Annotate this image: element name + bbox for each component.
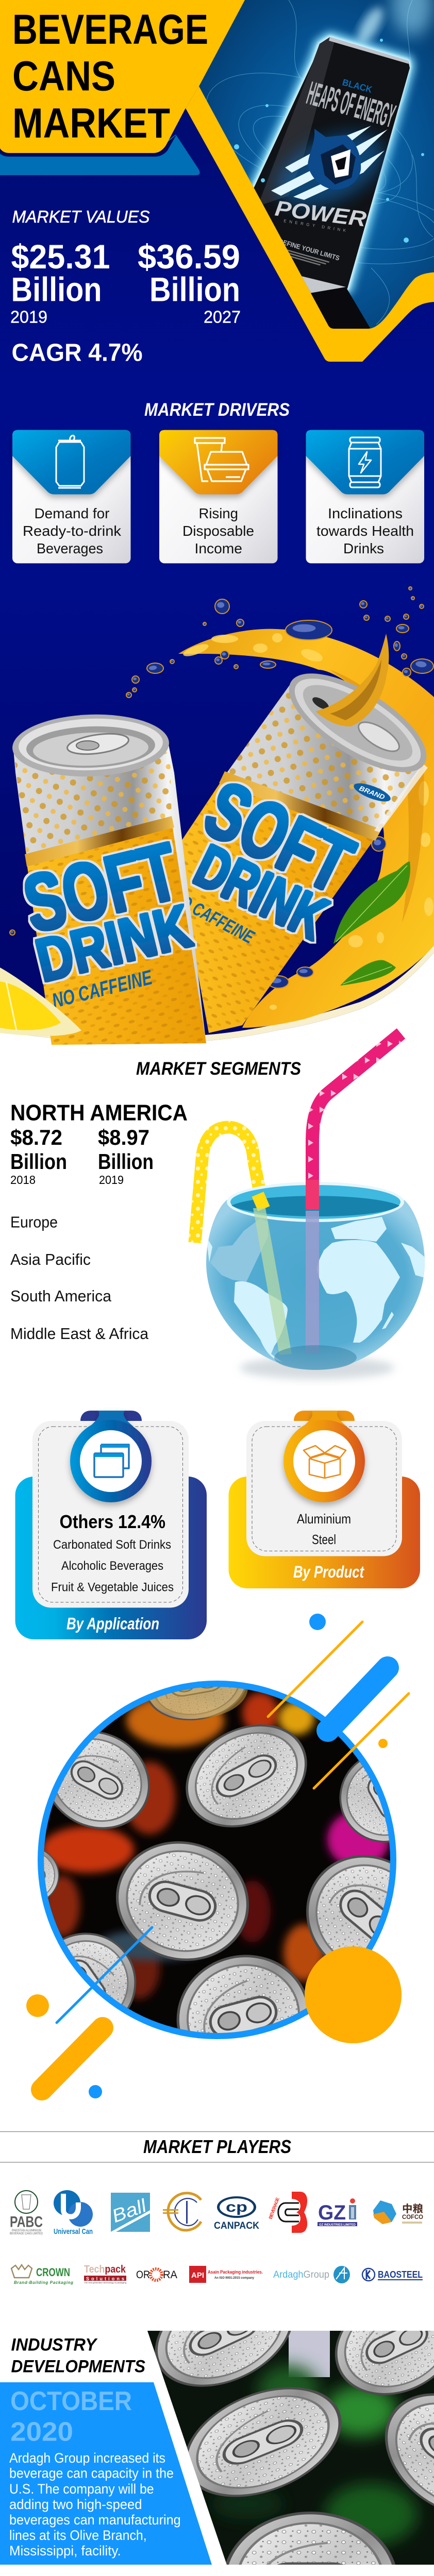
swirl lines bbox=[190, 0, 434, 325]
decorative accents around photo bbox=[26, 1614, 409, 2098]
driver card 3: Inclinations bbox=[328, 505, 403, 521]
logo: PABC bbox=[10, 2191, 43, 2235]
can blue lower glow bbox=[269, 124, 390, 216]
driver card 3: towards Health bbox=[316, 523, 414, 539]
logo: COFCO bbox=[373, 2200, 423, 2224]
hero can image panel: POWER bbox=[274, 196, 368, 231]
logo: Ball: Ball bbox=[109, 2195, 149, 2227]
value 2027 bbox=[138, 238, 241, 327]
value 2019: $25.31 bbox=[11, 238, 110, 276]
logo: Universal Can: Universal Can bbox=[54, 2227, 93, 2236]
logo: Asain Packaging: API bbox=[191, 2271, 204, 2280]
glow dots bbox=[234, 39, 424, 243]
market segments heading: MARKET SEGMENTS bbox=[136, 1059, 301, 1079]
driver card 1: Beverages bbox=[37, 540, 103, 556]
other regions: Asia Pacific bbox=[10, 1250, 91, 1268]
accent: orange line bbox=[314, 1693, 409, 1788]
right can rim bbox=[274, 654, 434, 791]
badge ring bbox=[70, 1411, 152, 1502]
yellow chevron band bbox=[186, 87, 434, 362]
industry developments heading: INDUSTRY bbox=[11, 2335, 98, 2355]
segment card: by product: Steel bbox=[312, 1532, 336, 1547]
juice swirl bbox=[315, 634, 389, 726]
logo: PABC: PABC bbox=[10, 2213, 43, 2231]
market values heading: MARKET VALUES bbox=[12, 207, 149, 226]
north america data: 2019 bbox=[99, 1173, 124, 1187]
can top rim bbox=[329, 37, 409, 64]
pink straw bbox=[312, 1033, 401, 1210]
logo: ORORA: RA bbox=[163, 2269, 177, 2281]
badge tab bbox=[294, 1411, 355, 1421]
logo: Ardagh Group bbox=[273, 2266, 350, 2283]
other regions: Europe bbox=[10, 1213, 58, 1231]
logo: Techpack: Techpack bbox=[84, 2264, 126, 2275]
can body bbox=[253, 37, 410, 294]
splash highlights bbox=[182, 633, 433, 1010]
white curve below illustration bbox=[0, 953, 434, 1087]
driver card 1 bbox=[12, 430, 131, 563]
badge tab bbox=[80, 1411, 142, 1421]
logo: CANPACK bbox=[214, 2196, 259, 2231]
october 2020 panel: lines at its Olive Branch, bbox=[9, 2528, 147, 2543]
value 2027: $36.59 bbox=[138, 238, 240, 276]
logo: Ball bbox=[109, 2193, 150, 2232]
can slashes bbox=[271, 126, 388, 200]
can silver base bbox=[302, 276, 346, 293]
driver card 1: Ready-to-drink bbox=[23, 523, 122, 539]
logo: Techpack: The next generation technology in packaging bbox=[84, 2281, 126, 2284]
october 2020 panel: adding two high-speed bbox=[9, 2497, 142, 2512]
right can bbox=[168, 654, 434, 1033]
market players heading: MARKET PLAYERS bbox=[143, 2136, 291, 2157]
value 2019 bbox=[10, 238, 110, 327]
application list: Others 12.4% bbox=[60, 1511, 165, 1532]
title bbox=[12, 6, 208, 147]
logo: ORORA: OR bbox=[136, 2269, 150, 2281]
accent: orange dot bbox=[378, 1739, 388, 1748]
globe body bbox=[206, 1200, 425, 1370]
north america data: Billion bbox=[10, 1149, 67, 1174]
driver card 3: Drinks bbox=[343, 540, 384, 556]
accent: orange line bbox=[268, 1622, 362, 1717]
market drivers heading: MARKET DRIVERS bbox=[144, 400, 290, 420]
logo: Baosteel bbox=[362, 2268, 423, 2281]
october 2020 panel: beverage can capacity in the bbox=[9, 2466, 174, 2481]
north america data: NORTH AMERICA bbox=[10, 1100, 188, 1125]
accent: blue dot bbox=[89, 2085, 102, 2098]
left can lettering: SOFT bbox=[15, 825, 187, 950]
october 2020 panel bbox=[0, 2382, 212, 2565]
cream fringe bbox=[0, 945, 434, 1043]
driver card 2: Income bbox=[195, 540, 242, 556]
logo: COFCO: 中粮 bbox=[402, 2202, 423, 2215]
market values bbox=[10, 207, 241, 367]
segment card: by product bbox=[229, 1411, 420, 1588]
value 2019: Billion bbox=[11, 270, 102, 308]
market player logos bbox=[10, 2190, 423, 2285]
logo: GZI bbox=[318, 2198, 357, 2227]
title shadow bbox=[0, 135, 176, 157]
left can lettering: DRINK bbox=[30, 892, 198, 995]
accent: blue pill bbox=[328, 1668, 388, 1731]
october 2020 panel: U.S. The company will be bbox=[9, 2481, 154, 2497]
globe base shade bbox=[274, 1345, 357, 1370]
logo: Ceylon Beverage Can bbox=[268, 2192, 307, 2233]
right can: NO CAFFEINE bbox=[168, 887, 258, 948]
north america data: Billion bbox=[98, 1149, 154, 1174]
driver card 2: Disposable bbox=[182, 523, 254, 539]
globe shadow bbox=[240, 1357, 394, 1379]
orange splash ring bbox=[178, 629, 434, 1028]
logo: Ceylon Beverage Can: BEVERAGE bbox=[268, 2197, 280, 2220]
logo: CI euro bbox=[163, 2193, 201, 2230]
industry developments photo bbox=[147, 2331, 434, 2565]
left can bbox=[11, 712, 206, 1045]
accent: blue dot bbox=[309, 1614, 326, 1630]
october 2020 panel: OCTOBER bbox=[10, 2386, 132, 2416]
hero can image panel: DEFINE YOUR LIMITS bbox=[278, 237, 341, 262]
brand oval bbox=[352, 779, 393, 805]
north america data: 2018 bbox=[10, 1173, 36, 1187]
industry developments heading bbox=[11, 2335, 145, 2376]
industry developments heading: DEVELOPMENTS bbox=[11, 2357, 145, 2376]
droplets bbox=[10, 587, 434, 988]
logo: COFCO: COFCO bbox=[402, 2213, 423, 2221]
driver card 2 bbox=[159, 430, 277, 563]
title: CANS bbox=[12, 53, 115, 100]
logo: Asain Packaging: Asain Packaging industries. bbox=[208, 2269, 263, 2275]
icon: application windows bbox=[94, 1445, 129, 1477]
logo: CANPACK: cp bbox=[226, 2199, 247, 2215]
segment card: by application: Fruit & Vegetable Juices bbox=[51, 1581, 174, 1594]
photo circle of can tops bbox=[38, 1681, 396, 2039]
value 2027: 2027 bbox=[204, 307, 241, 327]
badge ring bbox=[283, 1411, 365, 1502]
october 2020 panel: Mississippi, facility. bbox=[9, 2543, 121, 2558]
logo: PABC: BEVERAGE CANS LIMITED bbox=[10, 2232, 43, 2235]
accent: large orange circle bbox=[305, 1946, 402, 2043]
north america data bbox=[10, 1100, 188, 1187]
logo: ORORA bbox=[136, 2269, 177, 2281]
accent: orange dot bbox=[26, 1994, 49, 2017]
logo: Universal Can bbox=[54, 2190, 93, 2236]
icon: energy can bbox=[349, 437, 381, 487]
other regions: South America bbox=[10, 1287, 112, 1305]
accent: orange pill bbox=[42, 2028, 103, 2090]
can bodies bbox=[126, 1695, 224, 1747]
inner panel bbox=[32, 1421, 189, 1607]
other regions bbox=[10, 1213, 149, 1343]
logo: Asain Packaging: An ISO 9001:2015 company bbox=[214, 2277, 255, 2280]
can text: BLACK bbox=[341, 77, 373, 95]
october 2020 panel: 2020 bbox=[10, 2417, 73, 2447]
logo: CANPACK: CANPACK bbox=[214, 2221, 259, 2231]
hero can image panel bbox=[190, 0, 434, 335]
logo: GZI: GZ bbox=[318, 2201, 346, 2224]
globe cup with straws bbox=[195, 1033, 425, 1379]
title banner bbox=[0, 0, 245, 153]
segment card: by application bbox=[15, 1411, 207, 1639]
submerged straw sections bbox=[253, 1208, 292, 1355]
logo: Techpack bbox=[84, 2264, 126, 2284]
value 2019: 2019 bbox=[10, 307, 47, 327]
logo: CROWN: Brand-Building Packaging bbox=[14, 2280, 73, 2285]
brand oval: BRAND bbox=[358, 784, 386, 801]
inner panel bbox=[246, 1421, 402, 1556]
driver card 1: Demand for bbox=[34, 505, 109, 521]
logo: CROWN: CROWN bbox=[36, 2266, 70, 2279]
icon: food box and cup bbox=[195, 438, 248, 481]
can glow bbox=[253, 37, 409, 294]
page background: navy upper panel bbox=[0, 0, 434, 1082]
can lids bbox=[148, 1687, 246, 1721]
leaves bbox=[333, 861, 410, 986]
globe water bbox=[227, 1182, 404, 1222]
logo: Asain Packaging bbox=[189, 2266, 263, 2283]
CAGR: CAGR 4.7% bbox=[11, 340, 142, 367]
yellow straw outer leg bbox=[195, 1127, 263, 1243]
logo: PABC: PAKISTAN ALUMINIUM bbox=[12, 2229, 41, 2232]
right can lettering bbox=[185, 764, 366, 953]
logo: GZI: GZ INDUSTRIES LIMITED bbox=[319, 2224, 356, 2227]
title: BEVERAGE bbox=[12, 6, 208, 53]
accent: blue line bbox=[57, 1927, 152, 2023]
reflection below can bbox=[310, 287, 371, 330]
continents bbox=[206, 1217, 425, 1362]
soft drink illustration bbox=[0, 587, 434, 1087]
title: MARKET bbox=[12, 100, 170, 147]
icon: can bbox=[56, 435, 84, 488]
segment card: by application: Carbonated Soft Drinks bbox=[53, 1538, 171, 1552]
left can lettering bbox=[15, 825, 198, 995]
can lids bbox=[138, 2260, 311, 2408]
right can lettering: DRINK bbox=[185, 832, 338, 953]
redrawn straw tops over water bbox=[258, 1194, 264, 1209]
segment card: by product: By Product bbox=[293, 1563, 364, 1581]
logo: Baosteel: BAOSTEEL bbox=[378, 2269, 423, 2280]
product list: Aluminium bbox=[297, 1511, 351, 1527]
driver card 2: Rising bbox=[199, 505, 238, 521]
left can: NO CAFFEINE bbox=[50, 966, 155, 1012]
other regions: Middle East & Africa bbox=[10, 1325, 149, 1343]
green can bodies bbox=[258, 2365, 320, 2416]
north america data: $8.72 bbox=[10, 1125, 62, 1149]
left can rim bbox=[11, 712, 170, 779]
icon: open box bbox=[304, 1446, 346, 1478]
october 2020 panel: beverages can manufacturing bbox=[9, 2512, 181, 2528]
segment card: by application: Alcoholic Beverages bbox=[61, 1559, 163, 1573]
segment card: by application: By Application bbox=[66, 1615, 159, 1633]
logo: CROWN bbox=[11, 2265, 73, 2285]
value 2027: Billion bbox=[149, 270, 240, 308]
north america data: $8.97 bbox=[98, 1125, 149, 1149]
driver card 3 bbox=[306, 430, 424, 563]
october 2020 panel: Ardagh Group increased its bbox=[9, 2450, 165, 2466]
right can lettering: SOFT bbox=[192, 764, 366, 911]
logo: Techpack: Solutions bbox=[86, 2276, 124, 2281]
bear emblem bbox=[308, 129, 361, 190]
hero can image panel: ENERGY DRINK bbox=[283, 218, 346, 233]
lemon slice bbox=[0, 968, 81, 1036]
logo: Ardagh Group: ArdaghGroup bbox=[273, 2269, 329, 2280]
blue band under title bbox=[0, 134, 200, 175]
